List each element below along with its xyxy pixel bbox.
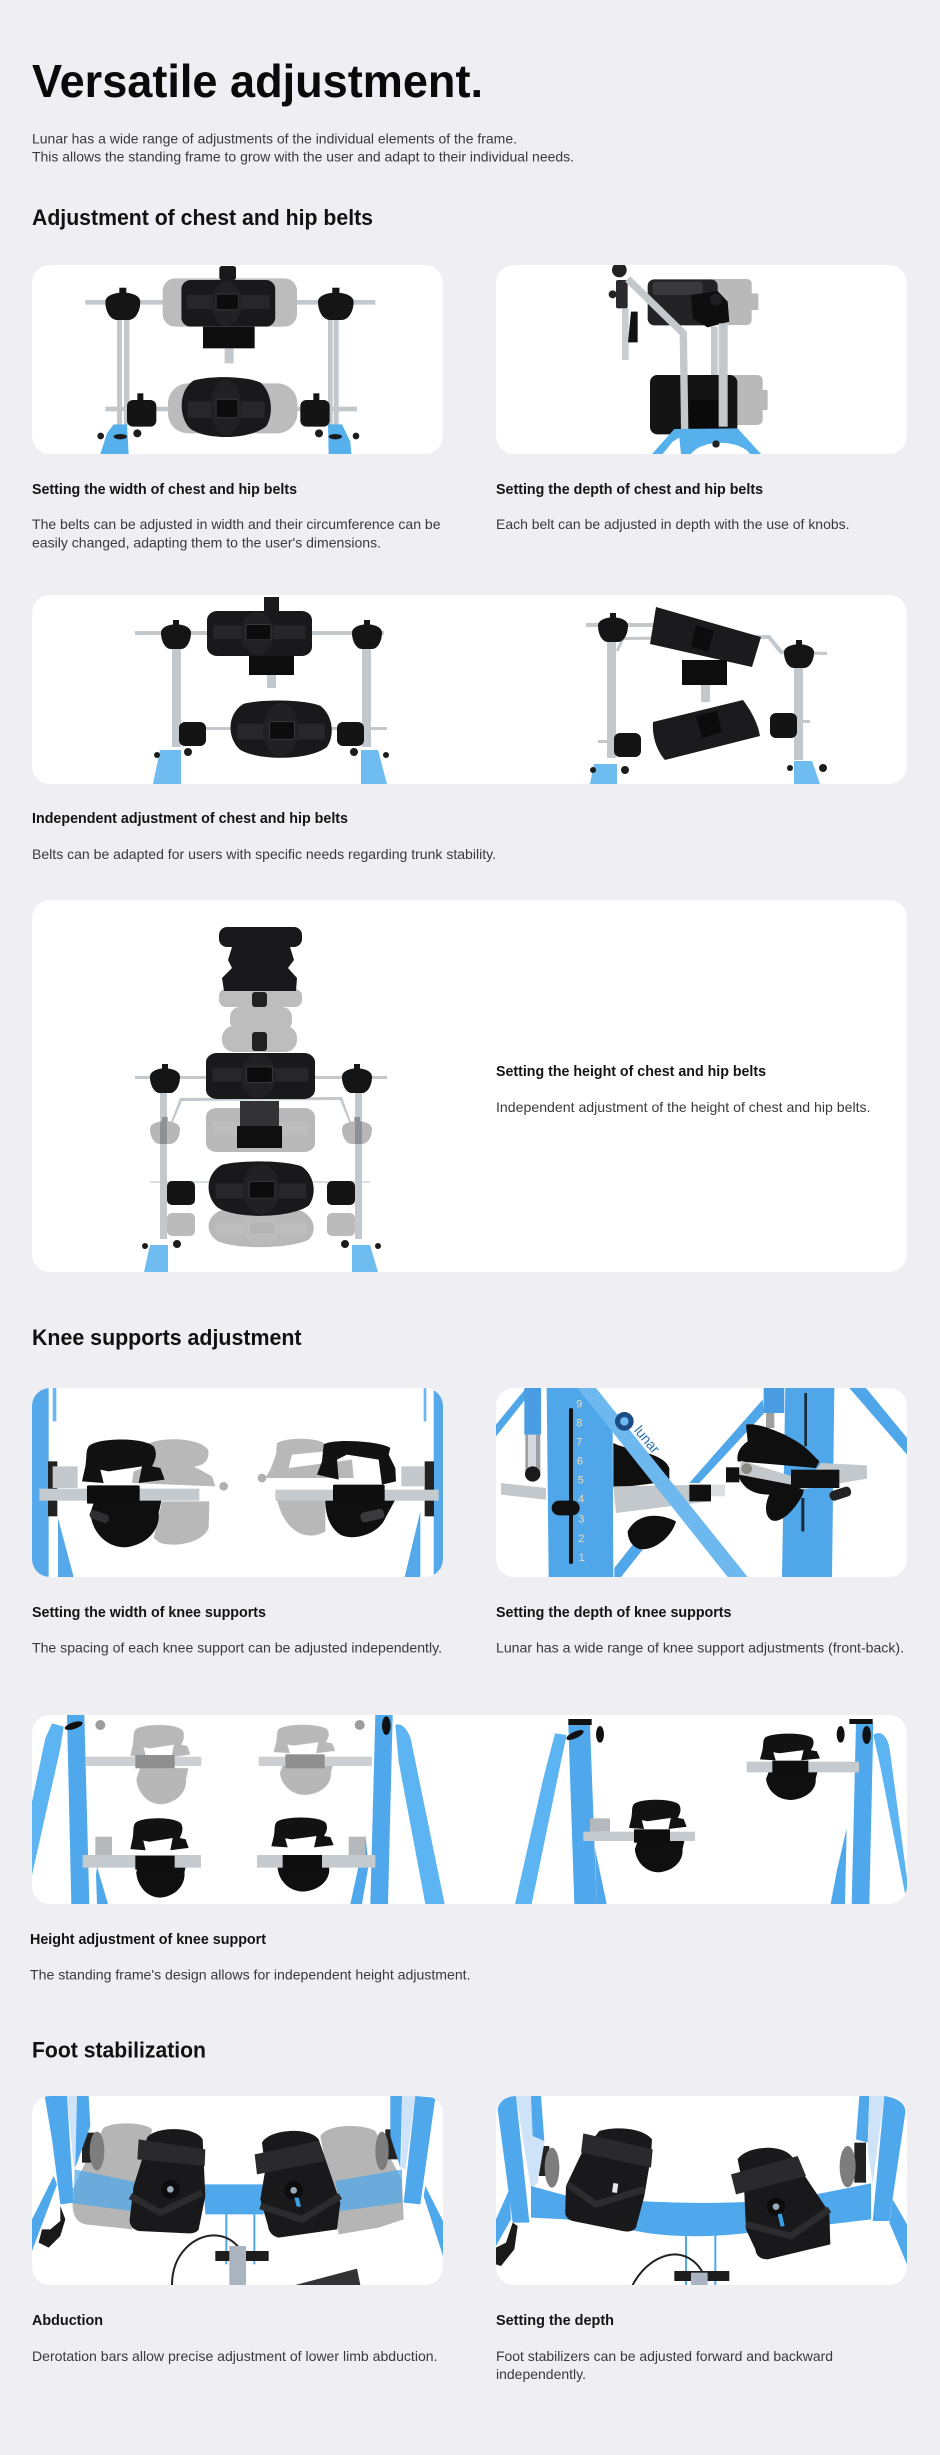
right knee support	[726, 1424, 867, 1521]
body: width of belts	[32, 516, 441, 550]
cable and clamp	[633, 2224, 729, 2285]
panel: depth of knee supports photo	[496, 1388, 907, 1577]
ghost feet	[72, 2123, 404, 2234]
left frame	[135, 597, 389, 784]
chrome pin	[524, 1388, 541, 1482]
diagonal tube with logo	[578, 1388, 748, 1577]
intro text: Lunar has a wide range of adjustments of the individual elements of the frame.	[32, 130, 517, 146]
right knee support	[275, 1441, 439, 1537]
lower knee supports	[83, 1817, 375, 1898]
body: height of belts: Independent adjustment of the height of chest and hip belts.	[496, 1099, 870, 1115]
body: depth of knee supports: Lunar has a wide range of knee support adjustments (front-back).	[496, 1640, 904, 1656]
subheading: setting the depth: Setting the depth	[496, 2312, 614, 2329]
blue frame right pair	[515, 1723, 908, 1904]
subheading: height of belts: Setting the height of chest and hip belts	[496, 1063, 766, 1080]
right column	[764, 1388, 834, 1577]
subheading: width of knee supports: Setting the width of knee supports	[32, 1604, 266, 1621]
scale numbers: 4	[578, 1494, 584, 1506]
blue side frames	[32, 1388, 443, 1577]
side device	[609, 263, 638, 360]
rear braces	[496, 1388, 907, 1577]
knobs	[97, 288, 359, 439]
subheading: depth of knee supports: Setting the depth of knee supports	[496, 1604, 732, 1621]
blue frame left pair	[32, 1715, 445, 1904]
body: setting the depth	[496, 2348, 833, 2382]
body: depth of belts: Each belt can be adjusted in depth with the use of knobs.	[496, 516, 850, 532]
panel: width of belts photo	[32, 265, 443, 454]
frame knobs	[64, 1716, 391, 1735]
subheading: independent adjustment: Independent adjustment of chest and hip belts	[32, 810, 348, 827]
ghost knee pads	[132, 1439, 354, 1545]
intro text	[32, 130, 574, 164]
panel: foot depth photo	[496, 2096, 907, 2285]
scale numbers: 9	[576, 1399, 582, 1411]
panel: height of knee supports photo	[32, 1715, 908, 1904]
left pair	[32, 1715, 445, 1904]
heading: foot stabilization: Foot stabilization	[32, 2038, 206, 2062]
scale numbers: 1	[579, 1552, 585, 1564]
dark chest pad	[219, 927, 302, 1051]
body: setting the depth: Foot stabilizers can be adjusted forward and backward	[496, 2348, 833, 2364]
knee support upper	[747, 1734, 859, 1800]
body: setting the depth: independently.	[496, 2366, 586, 2382]
side strap	[496, 2223, 518, 2266]
panel: abduction photo	[32, 2096, 443, 2285]
ghost chest pad	[219, 989, 302, 1052]
body: width of knee supports: The spacing of each knee support can be adjusted independently.	[32, 1640, 442, 1656]
ghost belts and knobs	[150, 1108, 372, 1247]
rear tube	[711, 327, 718, 377]
body: width of belts: The belts can be adjusted in width and their circumference can be	[32, 516, 441, 532]
scale numbers: 3	[578, 1514, 584, 1526]
left knee support	[39, 1439, 199, 1547]
heading: chest and hip belts: Adjustment of chest and hip belts	[32, 205, 373, 230]
chrome tubes	[628, 279, 728, 430]
scale numbers: 2	[578, 1533, 584, 1545]
frame	[135, 1076, 387, 1272]
booklet	[295, 2269, 360, 2285]
chest belt side	[648, 279, 729, 327]
blue frame	[496, 2096, 907, 2264]
wheels	[82, 2129, 399, 2170]
panel: height of belts	[32, 900, 907, 1272]
scale numbers: 8	[576, 1418, 582, 1430]
diagonal tube with logo: lunar	[631, 1422, 663, 1457]
scale numbers	[576, 1399, 585, 1564]
scale numbers: 5	[578, 1475, 584, 1487]
panel: depth of belts photo	[496, 263, 907, 454]
scale numbers: 7	[576, 1437, 582, 1449]
chrome frame	[85, 300, 375, 425]
side strap	[39, 2206, 65, 2248]
subheading: width of belts: Setting the width of chest and hip belts	[32, 481, 297, 498]
hip belt	[182, 377, 271, 437]
knee support mid	[583, 1800, 695, 1872]
subheading: height of knee support: Height adjustment of knee support	[30, 1931, 266, 1948]
frame tops and knobs	[565, 1719, 873, 1744]
panel: independent adjustment photo	[32, 595, 907, 784]
left knee support	[501, 1443, 725, 1549]
title: Versatile adjustment.	[32, 55, 483, 107]
body: width of belts: easily changed, adapting them to the user's dimensions.	[32, 534, 381, 550]
chest belt	[181, 266, 275, 348]
dark feet	[565, 2128, 830, 2259]
dark feet	[130, 2129, 340, 2238]
grey ghost belts	[709, 279, 768, 425]
hip belt side	[650, 375, 737, 434]
blue frame	[32, 2096, 443, 2256]
panel: width of knee supports photo	[32, 1388, 443, 1577]
scale numbers: 6	[577, 1456, 583, 1468]
ghost knee supports	[130, 1725, 335, 1804]
cable and clamp	[172, 2208, 269, 2285]
wheels	[536, 2143, 866, 2188]
right frame	[586, 607, 827, 784]
chest and hip belts	[150, 1053, 372, 1216]
blue column with scale	[547, 1388, 613, 1577]
metal brackets	[53, 1466, 425, 1488]
heading: knee supports: Knee supports adjustment	[32, 1325, 302, 1350]
body: height of knee support: The standing frame's design allows for independent height adjustment.	[30, 1966, 470, 1982]
right pair	[515, 1719, 908, 1904]
intro text: This allows the standing frame to grow with the user and adapt to their individual needs.	[32, 148, 574, 164]
blue base	[652, 428, 761, 454]
body: independent adjustment: Belts can be adapted for users with specific needs regarding trunk stability.	[32, 846, 496, 862]
body: abduction: Derotation bars allow precise adjustment of lower limb abduction.	[32, 2348, 438, 2364]
subheading: abduction: Abduction	[32, 2312, 103, 2329]
ghost belts	[163, 278, 297, 433]
blue feet	[100, 424, 351, 454]
subheading: depth of belts: Setting the depth of chest and hip belts	[496, 481, 763, 498]
